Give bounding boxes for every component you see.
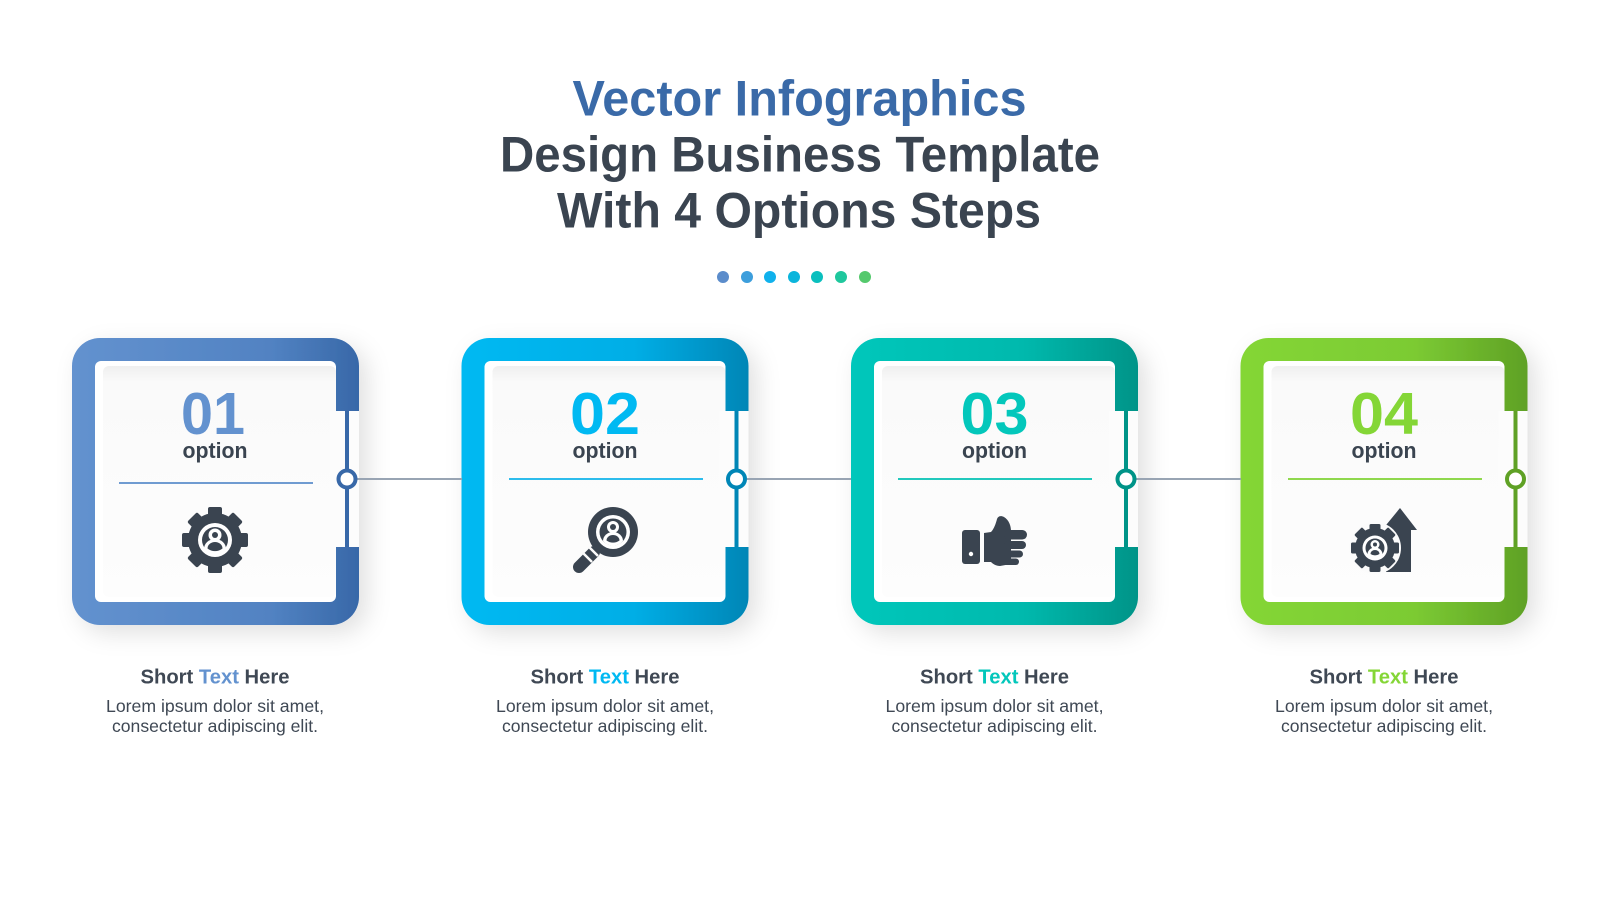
- description: Lorem ipsum dolor sit amet,: [1275, 696, 1493, 716]
- short text heading: Short Text Here: [1310, 666, 1458, 688]
- number 03: 03: [960, 381, 1028, 447]
- panel: option 01: [72, 338, 359, 736]
- short text heading: Short Text Here: [140, 666, 290, 688]
- connector line 2 to 3: [747, 478, 851, 480]
- description: [886, 696, 1104, 736]
- description: Lorem ipsum dolor sit amet,: [886, 696, 1104, 716]
- description: consectetur adipiscing elit.: [502, 716, 708, 736]
- option label: option: [182, 438, 248, 463]
- description: [496, 696, 714, 736]
- step node 2: [728, 470, 745, 488]
- option label: option: [572, 438, 638, 463]
- description: consectetur adipiscing elit.: [1281, 716, 1487, 736]
- option label: option: [962, 438, 1027, 463]
- panel: option 02: [462, 338, 748, 736]
- step node 3: [1118, 470, 1134, 488]
- icon: gear with upward arrow: [1349, 508, 1417, 574]
- number 04: 04: [1350, 381, 1418, 447]
- description: Lorem ipsum dolor sit amet,: [496, 696, 714, 716]
- description: [1275, 696, 1493, 736]
- option label: option: [1352, 438, 1416, 463]
- title: With 4 Options Steps: [557, 182, 1041, 238]
- description: consectetur adipiscing elit.: [892, 716, 1098, 736]
- decorative dot row: [717, 271, 871, 283]
- connector line 1 to 2: [357, 478, 462, 480]
- step node 4: [1507, 470, 1524, 488]
- connector line 3 to 4: [1136, 478, 1241, 480]
- panel: option 03: [851, 338, 1138, 736]
- title: [500, 70, 1100, 238]
- description: Lorem ipsum dolor sit amet,: [106, 696, 324, 716]
- icon: gear with person: [182, 507, 248, 573]
- icon: thumbs up: [962, 516, 1027, 566]
- icon: magnifier with person: [579, 507, 638, 567]
- panel: option 04: [1240, 338, 1528, 736]
- description: consectetur adipiscing elit.: [112, 716, 318, 736]
- title: Vector Infographics: [572, 70, 1026, 126]
- step node 1: [338, 470, 356, 488]
- number 01: 01: [181, 381, 245, 447]
- number 02: 02: [570, 381, 640, 447]
- short text heading: Short Text Here: [920, 666, 1069, 688]
- description: [106, 696, 324, 736]
- title: Design Business Template: [500, 126, 1100, 182]
- short text heading: Short Text Here: [530, 666, 680, 688]
